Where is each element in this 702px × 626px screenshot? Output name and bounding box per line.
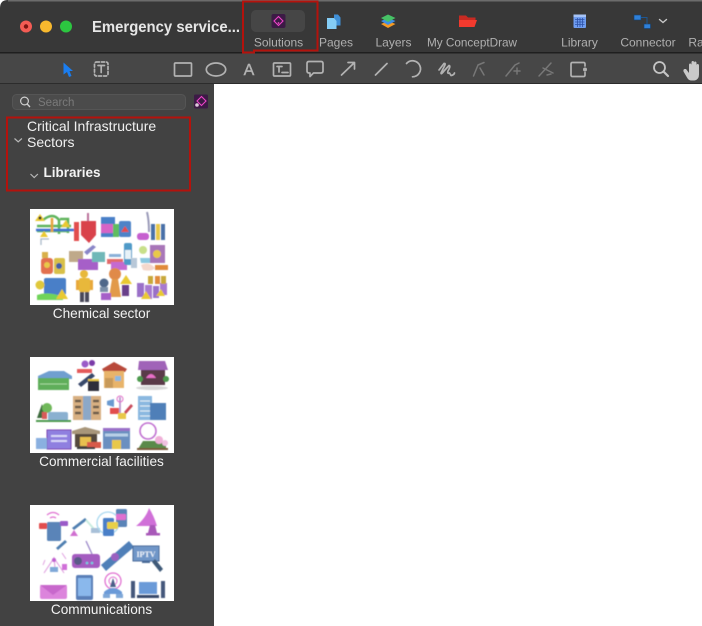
thumbnail: Communications: IPTV [136, 550, 156, 559]
toolbar button: Solutions [251, 10, 305, 50]
tree item: Libraries: Libraries [44, 165, 101, 180]
thumbnail: Communications [30, 505, 174, 601]
solutions shortcut icon [194, 94, 208, 108]
toolbar button: Connector: Connector [620, 36, 676, 50]
tree item: Critical Infrastructure Sectors: Sectors [27, 134, 74, 150]
tool: text frame [94, 62, 108, 76]
toolbar button: Pages: Pages [319, 36, 353, 50]
title bar background [0, 0, 702, 52]
search box [12, 94, 186, 110]
caption: Chemical sector: Chemical sector [53, 306, 151, 321]
toolbar button: Solutions: Solutions [254, 36, 303, 50]
tree item: Critical Infrastructure Sectors: Critical Infrastructure [27, 118, 156, 134]
caption: Communications: Communications [51, 602, 152, 617]
tool: arrow line [342, 62, 354, 75]
tool: edit points (disabled) [474, 62, 484, 76]
thumbnail: Commercial facilities [30, 357, 174, 453]
tool: callout [307, 62, 323, 76]
drawing toolbar background [0, 53, 702, 84]
tool: text A: A [244, 62, 255, 79]
window title: Emergency service... [92, 19, 240, 36]
tool: rectangle [174, 63, 192, 76]
tool: cut (disabled) [539, 63, 553, 76]
tool: note shape [571, 62, 587, 76]
toolbar button: Library [561, 14, 598, 50]
tool: ellipse [206, 63, 226, 76]
tree item: Critical Infrastructure Sectors [14, 118, 156, 150]
toolbar button: Connector [620, 15, 676, 50]
toolbar button: Library: Library [561, 36, 598, 50]
toolbar button: Layers: Layers [375, 36, 412, 50]
caption: Commercial facilities: Commercial facilities [39, 454, 164, 469]
tool: arc [406, 61, 420, 77]
toolbar button: My ConceptDraw: My ConceptDraw [427, 36, 517, 50]
thumbnail: Chemical sector [30, 209, 174, 305]
red highlight: Solutions button [243, 2, 318, 52]
window traffic light buttons [20, 20, 72, 32]
red highlight: tree items [7, 118, 190, 190]
toolbar button: My ConceptDraw [427, 16, 517, 50]
tool: select arrow [64, 62, 73, 77]
tool: add point (disabled) [506, 63, 520, 76]
tool: freehand [439, 63, 454, 76]
toolbar button: Layers [375, 14, 412, 50]
search box: Search [38, 97, 74, 109]
tool: search magnifier [654, 62, 668, 76]
toolbar button: Pages [319, 14, 353, 50]
sidebar panel [0, 84, 214, 626]
tool: line [376, 64, 387, 75]
canvas [214, 84, 702, 626]
tool: hand [683, 61, 699, 80]
tool: text box [274, 63, 290, 76]
